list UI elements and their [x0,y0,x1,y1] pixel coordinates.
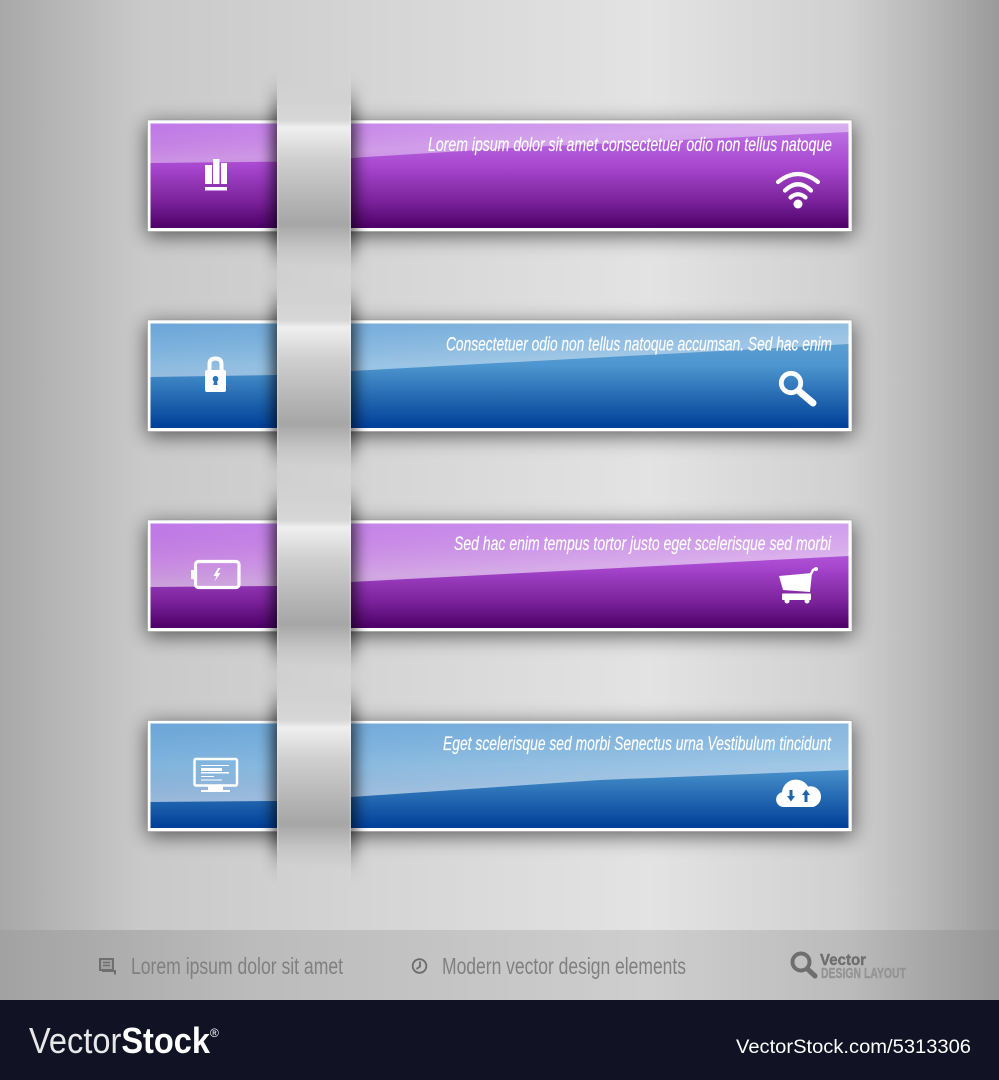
panel: banner 1 purple [147,120,853,236]
icon: monitor [194,759,237,792]
text: banner 2 caption: Consectetuer odio non tellus natoque accumsan. Sed hac enim [446,334,832,356]
icon: shopping cart [779,567,818,604]
vertical ribbon 1 [272,80,356,270]
logo: vector design layout: DESIGN LAYOUT [821,965,906,982]
logo: VectorStock: ® [210,1026,219,1040]
text: banner 1 caption: Lorem ipsum dolor sit amet consectetuer odio non tellus natoque [428,135,832,156]
text: banner 4 caption: Eget scelerisque sed morbi Senectus urna Vestibulum tincidunt [443,734,832,755]
icon: clock [413,959,426,973]
vertical ribbon 4 [272,680,356,870]
footer strip [0,930,999,1000]
panel: banner 2 blue [147,320,853,436]
icon: chat bubbles [100,959,115,974]
icon: cloud with arrows [776,780,821,807]
panel: banner 4 blue [147,720,853,836]
logo: vector design layout: Vector [820,952,866,969]
vertical ribbon 2 [272,280,356,470]
text: footer left: Lorem ipsum dolor sit amet [131,953,343,979]
logo: vector design layout [792,952,906,982]
vertical ribbon 3 [272,480,356,670]
text: footer middle: Modern vector design elements [442,953,686,979]
panel: banner 3 purple [147,520,853,636]
text: image id: VectorStock.com/5313306 [736,1036,971,1058]
icon: magnifier [781,373,813,403]
logo: VectorStock: VectorStock [29,1020,211,1061]
icon: bar chart [205,159,227,190]
icon: padlock [205,358,226,392]
icon: wifi [778,174,818,208]
icon: battery [191,562,239,588]
text: banner 3 caption: Sed hac enim tempus tortor justo eget scelerisque sed morbi [454,534,832,555]
watermark bar [0,1000,999,1080]
